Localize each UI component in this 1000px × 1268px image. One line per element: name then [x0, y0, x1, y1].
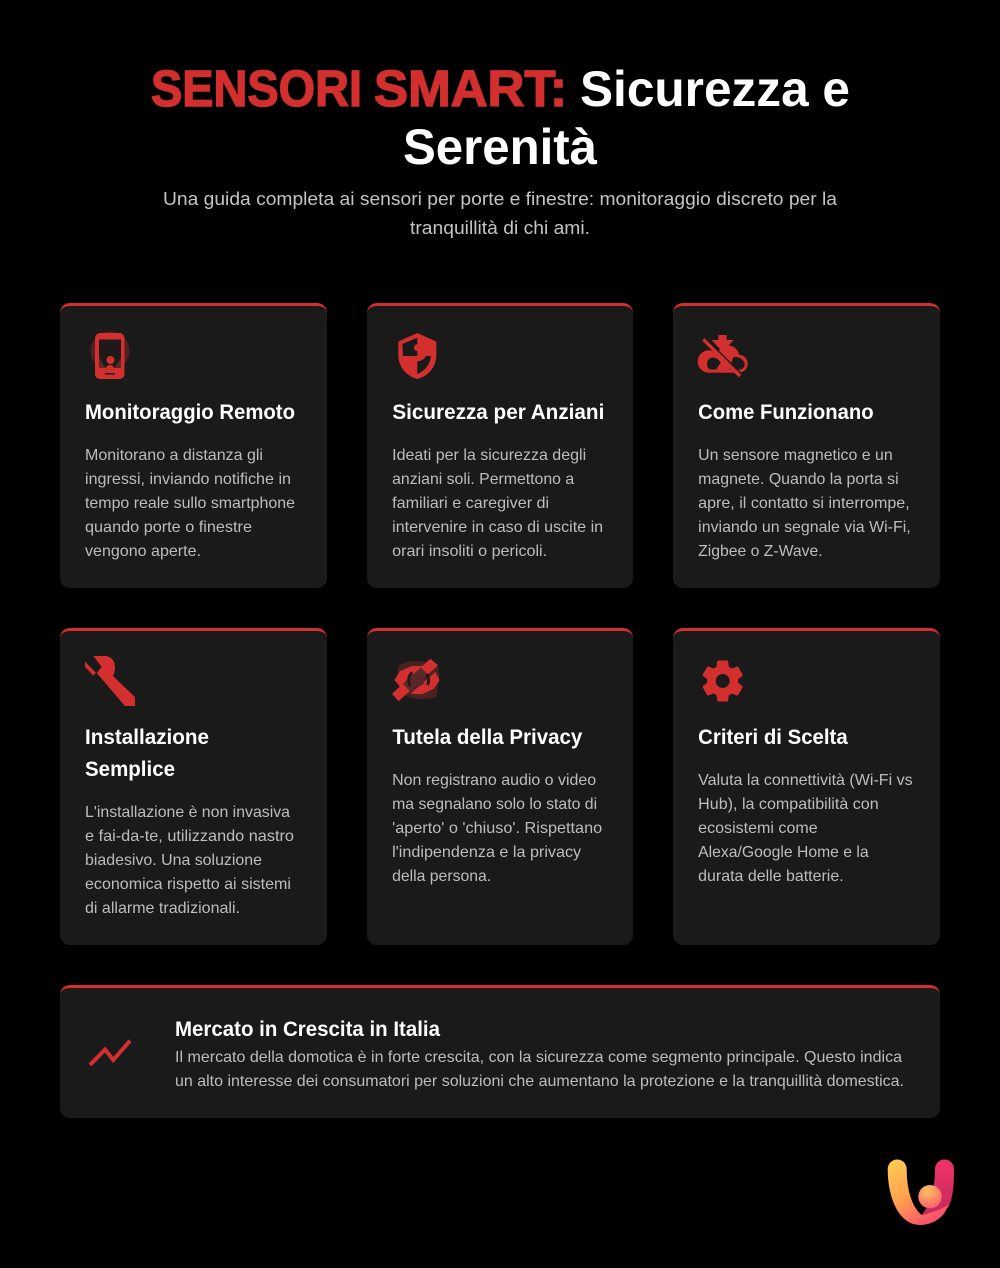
text block: biadesivo. Una soluzione	[85, 852, 262, 869]
text block	[85, 804, 294, 917]
icon: wrench	[85, 656, 135, 706]
text block: di allarme tradizionali.	[85, 900, 240, 917]
text block: Non registrano audio o video	[392, 772, 596, 789]
text block: tempo reale sullo smartphone	[85, 495, 295, 512]
heading: Come Funzionano	[698, 401, 874, 424]
heading: Semplice	[85, 758, 175, 781]
text block: apre, il contatto si interrompe,	[698, 495, 910, 512]
heading: Monitoraggio Remoto	[85, 401, 295, 424]
text block: 'aperto' o 'chiuso'. Rispettano	[392, 820, 602, 837]
text block: vengono aperte.	[85, 543, 201, 560]
text block: Ideati per la sicurezza degli	[392, 447, 586, 464]
text block	[698, 447, 911, 560]
text block: ma segnalano solo lo stato di	[392, 796, 597, 813]
subtitle	[163, 189, 837, 239]
text block: un alto interesse dei consumatori per soluzioni che aumentano la protezione e la tranquillità domestica.	[175, 1073, 904, 1090]
title: Serenità	[403, 118, 598, 175]
title: Sicurezza e	[580, 60, 850, 117]
title	[151, 60, 850, 175]
text block: Il mercato della domotica è in forte crescita, con la sicurezza come segmento principale. Questo indica	[175, 1049, 902, 1066]
icon: crossed eye	[392, 659, 439, 701]
icon: shield	[398, 333, 436, 379]
text block: economica rispetto ai sistemi	[85, 876, 291, 893]
icon: smartphone with signal	[90, 332, 130, 379]
text block: quando porte o finestre	[85, 519, 252, 536]
title: SENSORI	[151, 60, 362, 117]
logo	[888, 1160, 954, 1225]
panel: Come Funzionano	[673, 303, 940, 588]
text block	[175, 1049, 904, 1090]
text block	[392, 772, 602, 885]
text block: ecosistemi come	[698, 820, 818, 837]
text block	[85, 447, 295, 560]
heading: Sicurezza per Anziani	[392, 401, 604, 424]
heading: Installazione	[85, 726, 209, 749]
text block	[698, 772, 913, 885]
text block: familiari e caregiver di	[392, 495, 549, 512]
text block: Alexa/Google Home e la	[698, 844, 869, 861]
subtitle: Una guida completa ai sensori per porte e finestre: monitoraggio discreto per la	[163, 189, 837, 210]
panel: Mercato in Crescita in Italia	[60, 985, 940, 1118]
text block: della persona.	[392, 868, 491, 885]
heading: Mercato in Crescita in Italia	[175, 1018, 440, 1041]
header: title and subtitle	[151, 60, 850, 239]
text block: durata delle batterie.	[698, 868, 844, 885]
text block: Valuta la connettività (Wi-Fi vs	[698, 772, 913, 789]
icon: gear	[704, 661, 742, 701]
panel: Installazione Semplice	[60, 628, 327, 945]
text block: anziani soli. Permettono a	[392, 471, 574, 488]
text block: L'installazione è non invasiva	[85, 804, 290, 821]
subtitle: tranquillità di chi ami.	[410, 218, 590, 239]
title: SMART:	[374, 60, 567, 117]
text block: inviando un segnale via Wi-Fi,	[698, 519, 911, 536]
icon: trend line	[90, 1041, 130, 1065]
text block: l'indipendenza e la privacy	[392, 844, 581, 861]
panel: Tutela della Privacy	[367, 628, 633, 945]
text block: Zigbee o Z-Wave.	[698, 543, 823, 560]
text block: intervenire in caso di uscite in	[392, 519, 603, 536]
text block: Monitorano a distanza gli	[85, 447, 263, 464]
text block: orari insoliti o pericoli.	[392, 543, 547, 560]
text block: ingressi, inviando notifiche in	[85, 471, 291, 488]
icon: cloud with arrow and slash	[698, 335, 748, 376]
text block: e fai-da-te, utilizzando nastro	[85, 828, 294, 845]
text block	[392, 447, 603, 560]
panel: Sicurezza per Anziani	[367, 303, 633, 588]
panel: Criteri di Scelta	[673, 628, 940, 945]
text block: Hub), la compatibilità con	[698, 796, 879, 813]
heading: Tutela della Privacy	[392, 726, 582, 749]
text block: Un sensore magnetico e un	[698, 447, 893, 464]
panel: Monitoraggio Remoto	[60, 303, 327, 588]
text block: magnete. Quando la porta si	[698, 471, 899, 488]
heading	[85, 726, 209, 781]
heading: Criteri di Scelta	[698, 726, 848, 749]
